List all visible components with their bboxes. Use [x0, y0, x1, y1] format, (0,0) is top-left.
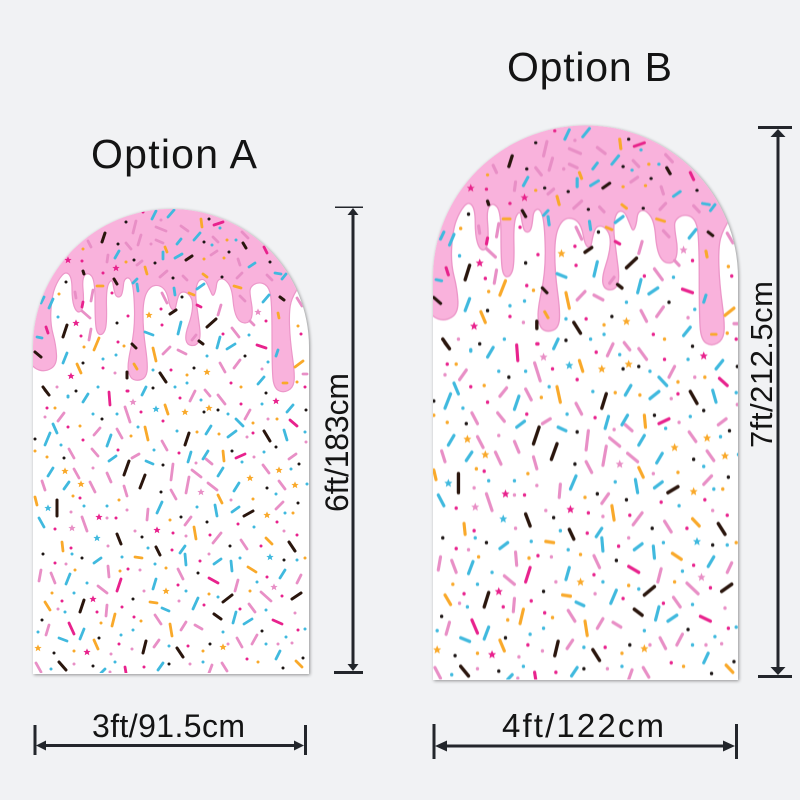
- dimension: Option B width: [432, 724, 738, 759]
- pink dots: [45, 220, 306, 672]
- dimension: Option A height: [334, 206, 363, 674]
- star sprinkles: [34, 256, 299, 655]
- artwork: pink drips and sprinkles: [30, 190, 320, 673]
- pink icing drips: [30, 190, 320, 392]
- label: Option B height: 7ft/212.5cm: [744, 281, 779, 448]
- pink sprinkles: [36, 221, 307, 673]
- panel: Option A arch backdrop: [30, 190, 320, 674]
- label: Option B width: 4ft/122cm: [502, 707, 664, 744]
- magenta dots: [47, 212, 305, 667]
- dimension: Option B height: [758, 126, 792, 678]
- artwork: pink drips and sprinkles, larger: [428, 105, 753, 679]
- panel: Option B arch backdrop: [428, 105, 753, 680]
- label: Option A width: 3ft/91.5cm: [92, 708, 245, 744]
- black dots: [35, 219, 306, 668]
- orange sprinkles: [35, 219, 303, 667]
- label: Option A height: 6ft/183cm: [319, 373, 355, 512]
- title: Option B: Option B: [507, 44, 672, 90]
- blue sprinkles: [37, 210, 293, 673]
- chocolate sprinkles: [35, 233, 301, 670]
- title: Option A: Option A: [91, 131, 258, 177]
- blue dots: [38, 228, 307, 669]
- dimension: Option A width: [34, 725, 307, 755]
- orange dots: [35, 240, 305, 662]
- magenta sprinkles: [46, 222, 297, 673]
